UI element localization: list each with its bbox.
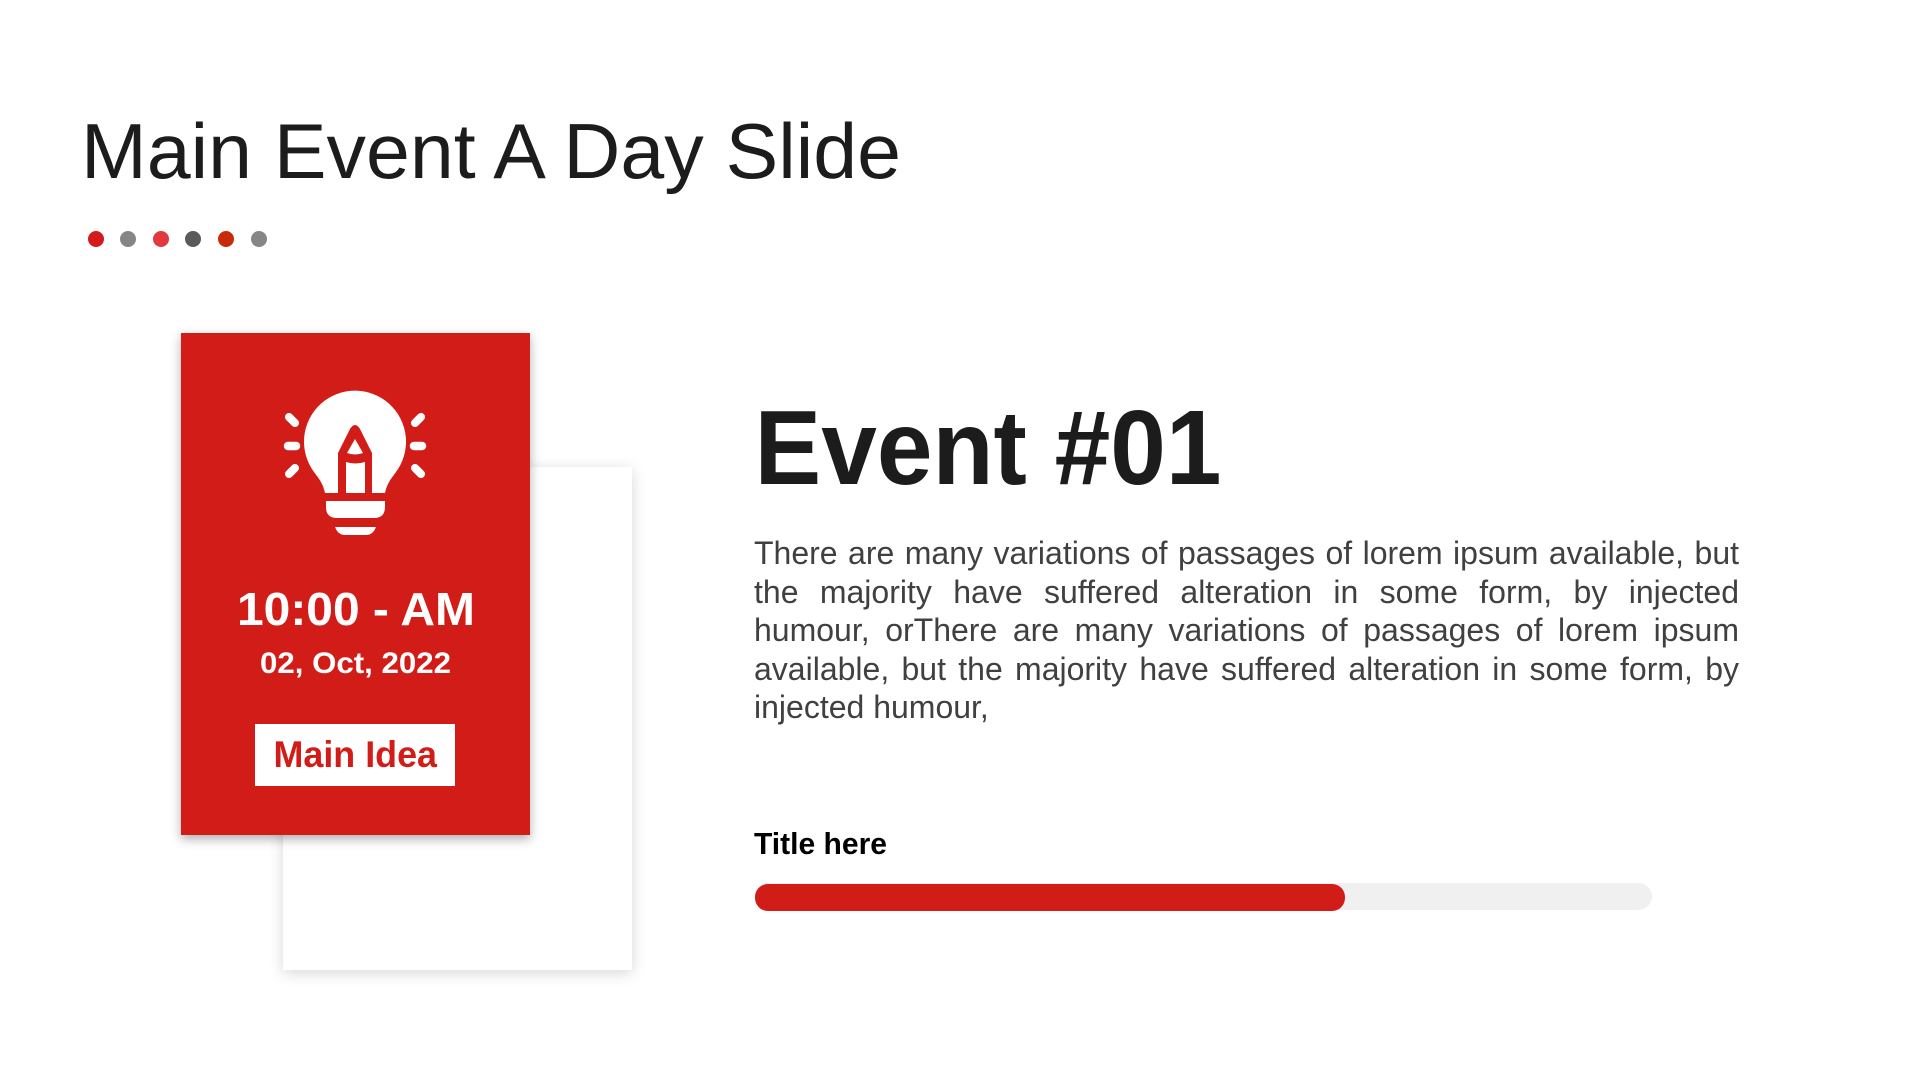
progress fill: [755, 884, 1345, 911]
body text paragraph: humour, orThere are many variations of passages of lorem ipsum: [754, 612, 1739, 648]
body text paragraph: available, but the majority have suffered alteration in some form, by: [754, 651, 1739, 687]
time: 10:00 - AM: [237, 583, 475, 635]
body text paragraph: injected humour,: [754, 689, 989, 725]
panel: red event card: [181, 333, 530, 835]
progress label: Title here: [754, 826, 887, 861]
decorative dot row: [88, 231, 267, 247]
body text paragraph: the majority have suffered alteration in some form, by injected: [754, 574, 1739, 610]
label: main idea button: [255, 724, 455, 786]
icon: light bulb with pencil: [288, 391, 422, 535]
title: Main Event A Day Slide: [81, 107, 901, 195]
progress track: [755, 883, 1652, 910]
panel: white back card: [283, 467, 632, 970]
date: 02, Oct, 2022: [260, 647, 451, 680]
label: main idea button: Main Idea: [274, 734, 437, 775]
heading: event number: Event #01: [754, 389, 1222, 507]
progress bar: [755, 883, 1652, 911]
body text paragraph: There are many variations of passages of lorem ipsum available, but: [754, 535, 1739, 571]
body text paragraph: [754, 535, 1739, 725]
